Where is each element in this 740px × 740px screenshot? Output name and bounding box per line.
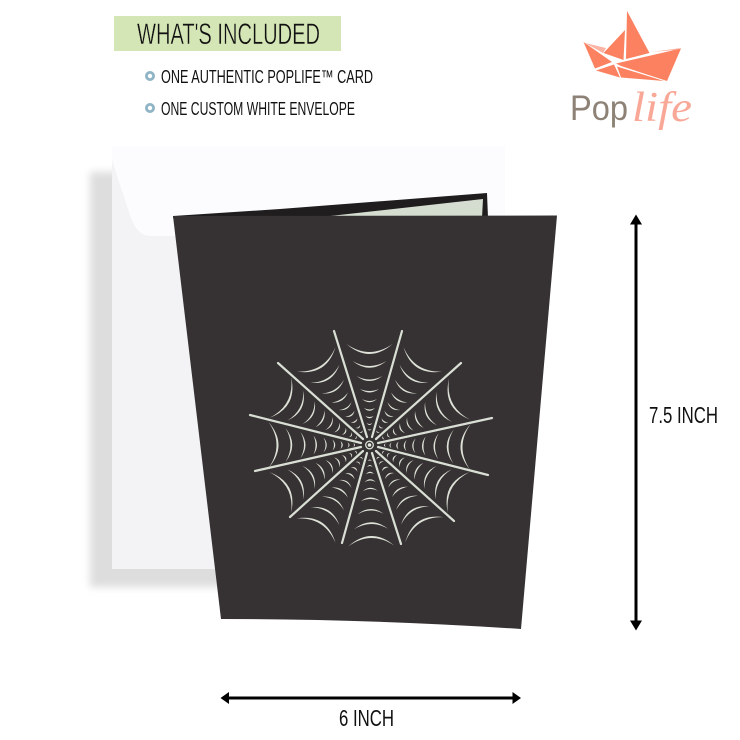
- heading: what's included: [114, 16, 341, 51]
- envelope shadow: [90, 172, 390, 587]
- web centre: [364, 440, 375, 450]
- icon: origami boat: [584, 11, 681, 81]
- item: white envelope: ONE CUSTOM WHITE ENVELOPE: [161, 98, 355, 119]
- label: width: 6 INCH: [339, 705, 394, 731]
- web spokes: [250, 331, 492, 544]
- item: poplife card: ONE AUTHENTIC POPLIFE™ CARD: [161, 66, 373, 87]
- list of included items: [146, 66, 373, 119]
- logo wordmark: life: [632, 85, 692, 131]
- web threads: [268, 344, 471, 546]
- envelope flap: [112, 146, 505, 236]
- item: white envelope: [146, 98, 355, 119]
- heading: what's included: WHAT'S INCLUDED: [137, 18, 320, 51]
- arrow: height dimension: [630, 214, 642, 630]
- spider web: [250, 331, 492, 546]
- card front: [173, 216, 557, 629]
- logo wordmark: Pop: [570, 89, 628, 128]
- inner card peeking behind front: [173, 193, 488, 218]
- envelope body: [112, 146, 505, 569]
- item: poplife card: [146, 66, 373, 87]
- logo: poplife: [570, 11, 692, 131]
- logo wordmark: [570, 85, 692, 131]
- envelope: [90, 146, 505, 587]
- arrow: width dimension: [220, 692, 521, 704]
